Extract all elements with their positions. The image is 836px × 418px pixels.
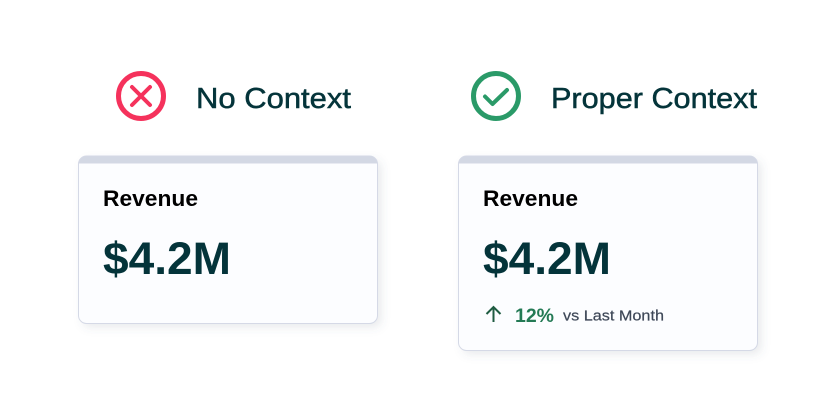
icon: red cross in circle xyxy=(118,74,164,118)
panel: no context card xyxy=(78,156,378,324)
comparison label: vs Last Month xyxy=(563,308,664,324)
icon: up arrow xyxy=(486,307,500,322)
change: 12%: 12% xyxy=(515,305,554,327)
comparison infographic xyxy=(78,71,763,356)
label: Revenue: Revenue xyxy=(483,186,578,211)
label: Revenue: Revenue xyxy=(103,186,198,211)
panel: proper context card xyxy=(458,156,758,350)
heading: No Context: No Context xyxy=(196,83,351,115)
icon: green check in circle xyxy=(474,74,518,118)
value: $4.2M: $4.2M xyxy=(483,233,611,284)
heading: Proper Context: Proper Context xyxy=(551,83,757,115)
value: $4.2M: $4.2M xyxy=(103,233,231,284)
